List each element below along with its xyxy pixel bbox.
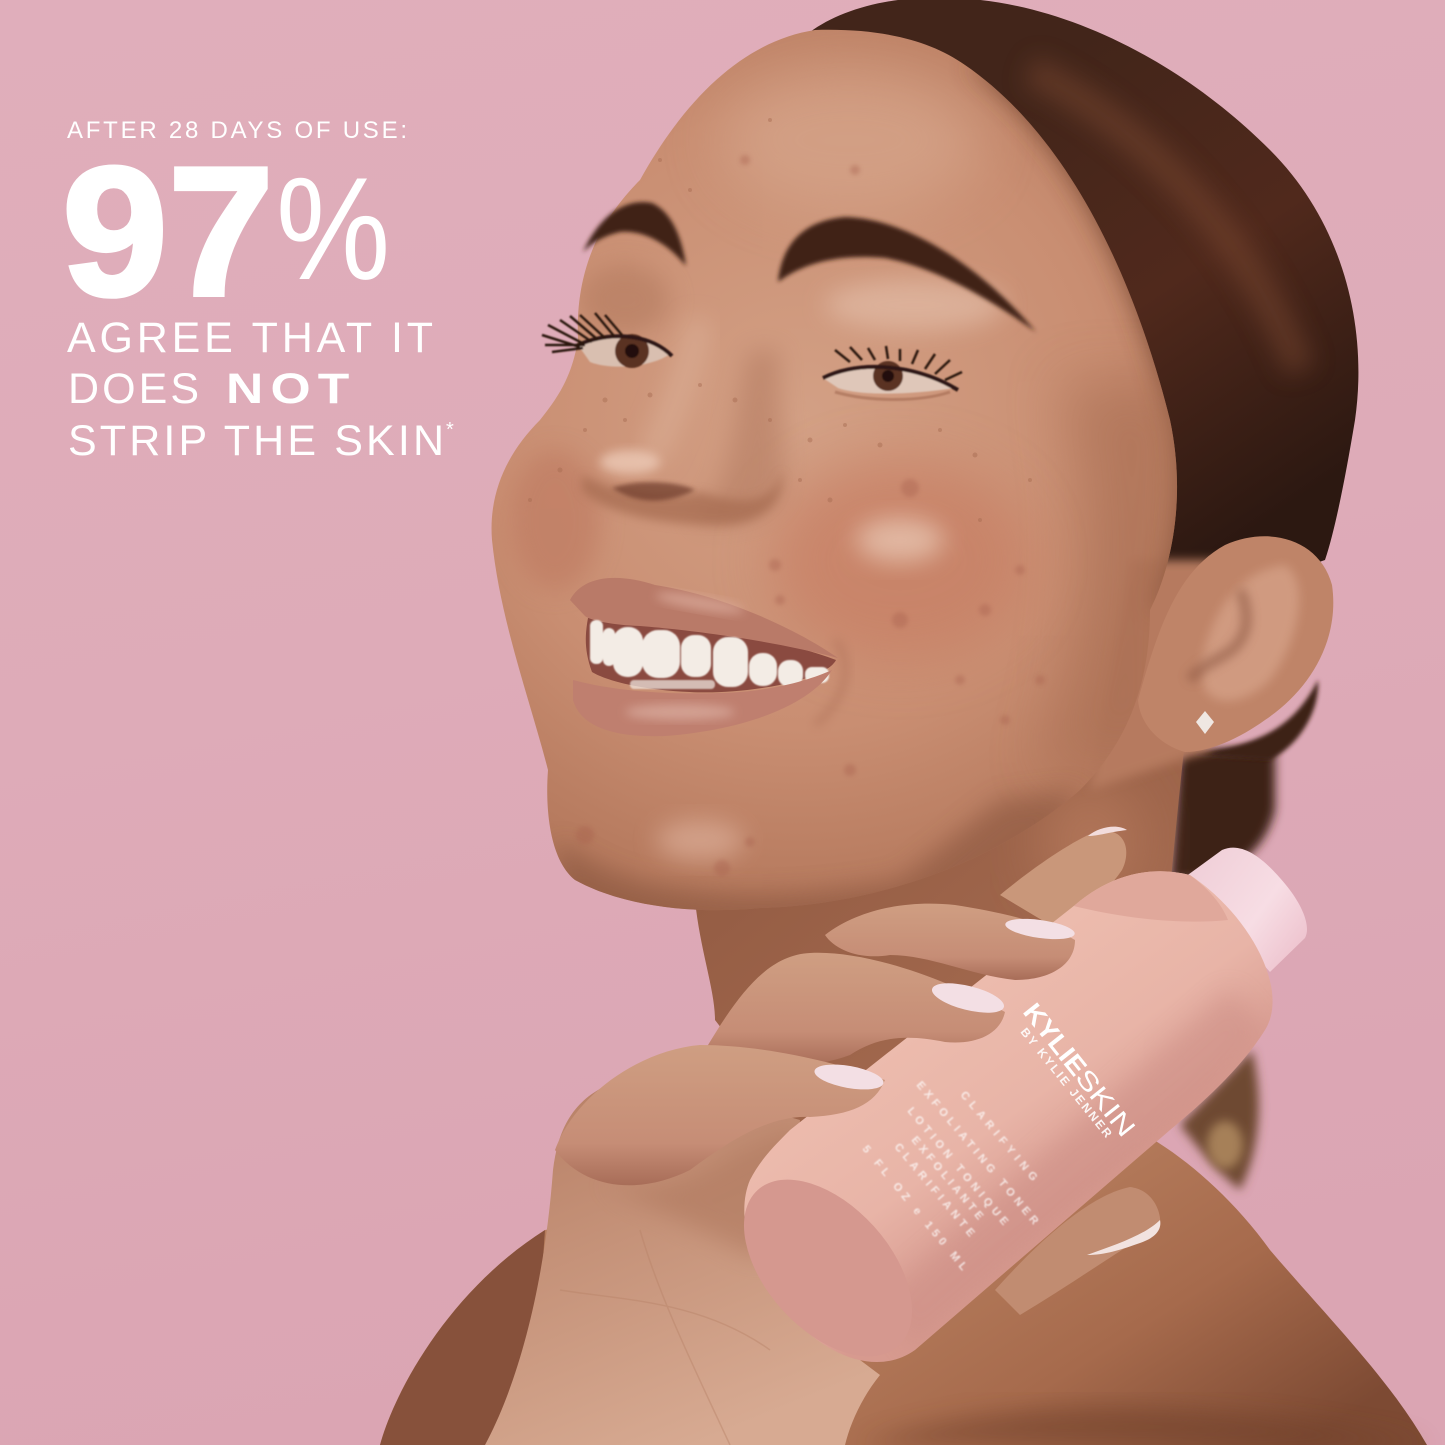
braid bbox=[1170, 750, 1275, 1190]
palm bbox=[485, 1075, 880, 1445]
hair below the ear bbox=[1190, 680, 1318, 760]
fingers in front of bottle bbox=[555, 904, 1076, 1185]
statement: AGREE THAT IT bbox=[67, 314, 433, 362]
big stat: % bbox=[276, 148, 390, 311]
statement: DOES bbox=[68, 365, 199, 413]
bottle edge shade bbox=[920, 998, 1250, 1282]
face shading bbox=[510, 65, 1230, 930]
product label: EXFOLIATING TONER bbox=[914, 1079, 1041, 1227]
lower lip bbox=[573, 670, 832, 736]
fourth finger bbox=[555, 1045, 885, 1185]
third finger bbox=[705, 953, 1005, 1066]
top finger bbox=[1000, 831, 1126, 925]
statement: * bbox=[446, 419, 454, 441]
ear fold bbox=[1190, 590, 1246, 680]
palm crease bbox=[590, 1130, 810, 1260]
brand: SKIN bbox=[1070, 1063, 1142, 1143]
product label: EXFOLIANTE bbox=[909, 1134, 985, 1222]
thumb nail bbox=[1087, 1220, 1160, 1255]
product label: 5 FL OZ e 150 ML bbox=[860, 1143, 969, 1273]
forehead glow bbox=[720, 70, 980, 210]
cap bbox=[1185, 848, 1307, 972]
hair bbox=[810, 0, 1358, 760]
nose bridge light bbox=[650, 320, 700, 460]
neck highlight bbox=[1040, 780, 1140, 900]
shoulder and neck bbox=[380, 740, 1430, 1445]
blemishes bbox=[576, 155, 1045, 876]
freckles bbox=[528, 118, 1032, 522]
face bbox=[492, 30, 1230, 930]
heading: AFTER 28 DAYS OF USE: bbox=[67, 117, 407, 144]
hand behind bottle bbox=[485, 827, 1160, 1445]
product label: CLARIFYING bbox=[958, 1089, 1040, 1183]
left cheek bbox=[510, 450, 600, 590]
eye socket shade left bbox=[580, 265, 670, 335]
brand byline: BY KYLIE JENNER bbox=[1018, 1025, 1115, 1141]
hairline shadow bbox=[968, 68, 1177, 602]
left eyebrow bbox=[583, 202, 686, 266]
right temple shading bbox=[1060, 370, 1177, 752]
bottle bbox=[712, 848, 1307, 1388]
bottle base bbox=[712, 1148, 944, 1388]
product label: CLARIFIANTE bbox=[892, 1141, 977, 1239]
mouth interior bbox=[586, 618, 836, 692]
liquid level bbox=[1070, 869, 1228, 922]
chin highlight bbox=[656, 820, 744, 860]
cheek blush bbox=[770, 460, 1030, 660]
top nail bbox=[1088, 827, 1127, 836]
shoulder bottom shadow bbox=[860, 1407, 1430, 1445]
fourth nail bbox=[813, 1060, 885, 1094]
big stat bbox=[62, 128, 390, 334]
nose bbox=[582, 450, 782, 525]
second nail bbox=[1004, 915, 1076, 943]
upper lip shine bbox=[654, 588, 746, 618]
left shoulder shadow bbox=[380, 1230, 545, 1445]
thumb bbox=[995, 1187, 1160, 1315]
shoulder bbox=[380, 1120, 1427, 1445]
second finger bbox=[825, 904, 1075, 980]
brand bbox=[1017, 997, 1142, 1143]
brow bone glow bbox=[825, 279, 1005, 331]
ear bbox=[1138, 536, 1333, 752]
smile crease bbox=[820, 650, 847, 720]
skin bridge to ear bbox=[1090, 560, 1230, 790]
upper lip bbox=[570, 578, 838, 658]
statement: STRIP THE SKIN bbox=[68, 417, 444, 465]
palm lines bbox=[560, 1230, 770, 1445]
statement bbox=[67, 314, 454, 465]
ear inner shading bbox=[1200, 565, 1299, 701]
big stat: 97 bbox=[62, 128, 274, 334]
right eye bbox=[823, 346, 962, 400]
bottle body bbox=[744, 871, 1273, 1362]
left eye bbox=[542, 313, 672, 368]
lower lip shine bbox=[625, 704, 735, 720]
chin shadow bbox=[558, 786, 1074, 910]
earring bbox=[1196, 711, 1214, 734]
third nail bbox=[929, 977, 1007, 1019]
neck bbox=[695, 740, 1185, 1140]
product label bbox=[860, 1079, 1041, 1273]
right eyebrow bbox=[778, 217, 1036, 332]
statement: NOT bbox=[226, 365, 357, 413]
hair shine bbox=[1030, 70, 1300, 370]
brand: KYLIE bbox=[1017, 997, 1093, 1081]
teeth bbox=[590, 620, 829, 689]
product label: LOTION TONIQUE bbox=[905, 1105, 1010, 1228]
nose side shadow bbox=[715, 350, 786, 503]
cheek highlight bbox=[856, 518, 944, 562]
